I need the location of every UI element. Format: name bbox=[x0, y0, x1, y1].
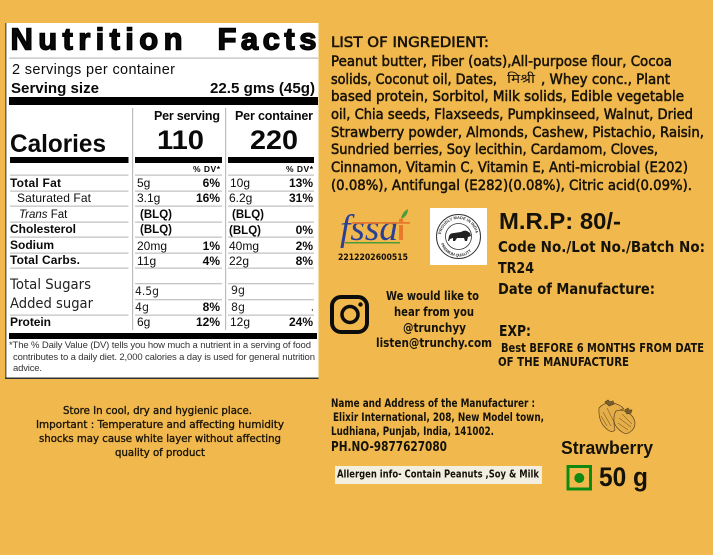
row: total fat: 5g bbox=[137, 176, 150, 190]
product details: OF THE MANUFACTURE bbox=[498, 355, 629, 369]
calories bbox=[10, 109, 313, 158]
row: sodium: 2% bbox=[296, 239, 313, 253]
footnote: *The % Daily Value (DV) tells you how much a nutrient in a serving of food bbox=[9, 340, 311, 351]
allergen info: Allergen info- Contain Peanuts ,Soy & Milk bbox=[337, 468, 540, 480]
manufacturer address bbox=[331, 396, 544, 455]
product details: TR24 bbox=[498, 259, 534, 277]
row: sodium: Sodium bbox=[10, 238, 54, 252]
nutrient table: % DV* bbox=[193, 164, 221, 174]
M.R.P. price: M.R.P: 80/- bbox=[499, 208, 621, 234]
icon: vegetarian mark bbox=[568, 466, 590, 489]
row: sodium bbox=[10, 238, 313, 253]
row: total sugars: 4.5g bbox=[135, 284, 159, 298]
row: total fat: 13% bbox=[289, 176, 313, 190]
row: total carbs: 22g bbox=[229, 254, 249, 268]
contact text: @trunchyy bbox=[403, 320, 466, 335]
storage instructions: Store In cool, dry and hygienic place. bbox=[63, 405, 252, 417]
contact text: listen@trunchy.com bbox=[376, 335, 492, 350]
manufacture date: Date of Manufacture: bbox=[498, 280, 655, 298]
row: sodium: 1% bbox=[203, 239, 220, 253]
row: protein: Protein bbox=[10, 315, 51, 329]
ingredient list: based protein, Sorbitol, Milk solids, Edible vegetable bbox=[331, 89, 684, 105]
row: saturated fat bbox=[17, 191, 313, 205]
row: protein bbox=[10, 315, 313, 329]
serving size: 22.5 gms (45g) bbox=[210, 81, 315, 97]
logo: fssai bbox=[338, 208, 410, 263]
contact text: We would like to bbox=[386, 288, 479, 303]
ingredient list: solids, Coconut oil, Dates, bbox=[331, 72, 497, 88]
row: total carbs: 11g bbox=[137, 254, 156, 268]
expiry: EXP: bbox=[499, 322, 531, 340]
badge: proudly made in India: PROUDLY MADE IN INDIA bbox=[438, 216, 478, 234]
panel: nutrition facts bbox=[5, 22, 318, 379]
row: saturated fat: 3.1g bbox=[137, 191, 160, 205]
row: cholesterol: (BLQ) bbox=[140, 224, 172, 236]
serving size: Serving size bbox=[11, 80, 99, 97]
storage instructions: shocks may cause white layer without affecting bbox=[39, 433, 281, 445]
ingredient list: Cinnamon, Vitamin C, Vitamin E, Anti-microbial (E202) bbox=[331, 160, 688, 176]
logo: fssai: fssa bbox=[340, 208, 398, 249]
row: saturated fat: Saturated Fat bbox=[17, 191, 92, 205]
row: total fat: Total Fat bbox=[10, 176, 61, 190]
flavour: Strawberry: Strawberry bbox=[561, 438, 653, 458]
row: total sugars bbox=[9, 277, 245, 298]
manufacturer address: Elixir International, 208, New Model town, bbox=[333, 410, 544, 424]
row: total carbs: 4% bbox=[203, 254, 220, 268]
title: Nutrition Facts: Nutrition bbox=[10, 22, 182, 56]
footnote: advice. bbox=[13, 363, 42, 374]
row: added sugar: Added sugar bbox=[10, 296, 93, 312]
row: added sugar: , bbox=[311, 302, 314, 312]
serving size bbox=[11, 80, 315, 97]
footnote bbox=[9, 340, 315, 374]
row: added sugar: 8g bbox=[231, 300, 245, 314]
ingredient list: Sundried berries, Soy lecithin, Cardamom, Cloves, bbox=[331, 142, 658, 158]
row: cholesterol bbox=[10, 222, 313, 237]
title: Nutrition Facts bbox=[10, 22, 316, 56]
calories: 220 bbox=[250, 125, 298, 155]
row: trans fat: (BLQ) bbox=[232, 209, 264, 221]
allergen info bbox=[335, 466, 542, 484]
ingredient list: Peanut butter, Fiber (oats),All-purpose flour, Cocoa bbox=[331, 54, 672, 70]
row: saturated fat: 31% bbox=[289, 191, 313, 205]
manufacturer address: Ludhiana, Punjab, India, 141002. bbox=[331, 424, 494, 438]
calories: Per container bbox=[235, 109, 313, 123]
ingredient list: LIST OF INGREDIENT: bbox=[331, 35, 489, 51]
row: added sugar bbox=[10, 296, 314, 314]
nutrient table: % DV* bbox=[286, 164, 314, 174]
servings per container: 2 servings per container bbox=[12, 62, 175, 78]
contact text: hear from you bbox=[394, 304, 474, 319]
ingredient list: (0.08%), Antifungal (E282)(0.08%), Citric acid(0.09%). bbox=[331, 178, 692, 194]
badge: proudly made in India: PREMIUM QUALITY bbox=[441, 243, 471, 258]
nutrient table bbox=[9, 164, 314, 329]
ingredient list bbox=[331, 35, 704, 194]
manufacturer address: Name and Address of the Manufacturer : bbox=[331, 396, 535, 410]
logo: fssai: i bbox=[397, 215, 405, 247]
icon: strawberry sketch bbox=[599, 400, 635, 434]
row: cholesterol: Cholesterol bbox=[10, 222, 76, 236]
row: total carbs: 8% bbox=[296, 254, 313, 268]
row: total carbs bbox=[10, 253, 313, 268]
storage instructions bbox=[36, 405, 284, 459]
row: protein: 12g bbox=[230, 315, 250, 329]
row: cholesterol: (BLQ) bbox=[229, 225, 261, 237]
manufacturer address: PH.NO-9877627080 bbox=[331, 440, 447, 455]
icon: instagram bbox=[332, 297, 367, 332]
row: total fat: 10g bbox=[230, 176, 250, 190]
license number: 2212202600515 bbox=[338, 253, 408, 263]
row: total fat bbox=[10, 176, 313, 190]
calories: Per serving bbox=[154, 109, 220, 123]
ingredient list: Strawberry powder, Almonds, Cashew, Pistachio, Raisin, bbox=[331, 125, 704, 141]
ingredient list: मिश्री bbox=[507, 71, 536, 89]
contact text bbox=[376, 288, 492, 350]
row: trans fat: (BLQ) bbox=[140, 209, 172, 221]
calories: 110 bbox=[157, 125, 204, 155]
calories: Calories bbox=[10, 130, 106, 158]
row: protein: 6g bbox=[137, 315, 150, 329]
row: total fat: 6% bbox=[203, 176, 220, 190]
ingredient list: oil, Chia seeds, Flaxseeds, Pumpkinseed, Walnut, Dried bbox=[331, 107, 693, 123]
row: total sugars: Total Sugars bbox=[9, 277, 91, 293]
storage instructions: quality of product bbox=[115, 447, 205, 459]
badge: proudly made in India bbox=[430, 208, 487, 265]
row: added sugar: 8% bbox=[203, 300, 220, 314]
footnote: contributes to a daily diet. 2,000 calories a day is used for general nutrition bbox=[13, 352, 315, 363]
row: total carbs: Total Carbs. bbox=[10, 253, 80, 267]
row: added sugar: 4g bbox=[135, 300, 149, 314]
row: saturated fat: 16% bbox=[196, 191, 220, 205]
title: Nutrition Facts: Facts bbox=[218, 22, 316, 56]
storage instructions: Important : Temperature and affecting humidity bbox=[36, 419, 284, 431]
row: sodium: 40mg bbox=[229, 239, 259, 253]
row: total sugars: 9g bbox=[231, 283, 245, 297]
row: protein: 24% bbox=[289, 315, 313, 329]
row: cholesterol: 0% bbox=[296, 223, 313, 237]
product details bbox=[498, 208, 705, 369]
ingredient list: , Whey conc., Plant bbox=[541, 72, 670, 88]
row: sodium: 20mg bbox=[137, 239, 167, 253]
row: trans fat: Trans Fat bbox=[19, 209, 68, 221]
row: saturated fat: 6.2g bbox=[229, 191, 252, 205]
row: protein: 12% bbox=[196, 315, 220, 329]
net weight: 50 g bbox=[599, 462, 648, 492]
row: trans fat bbox=[19, 209, 264, 221]
